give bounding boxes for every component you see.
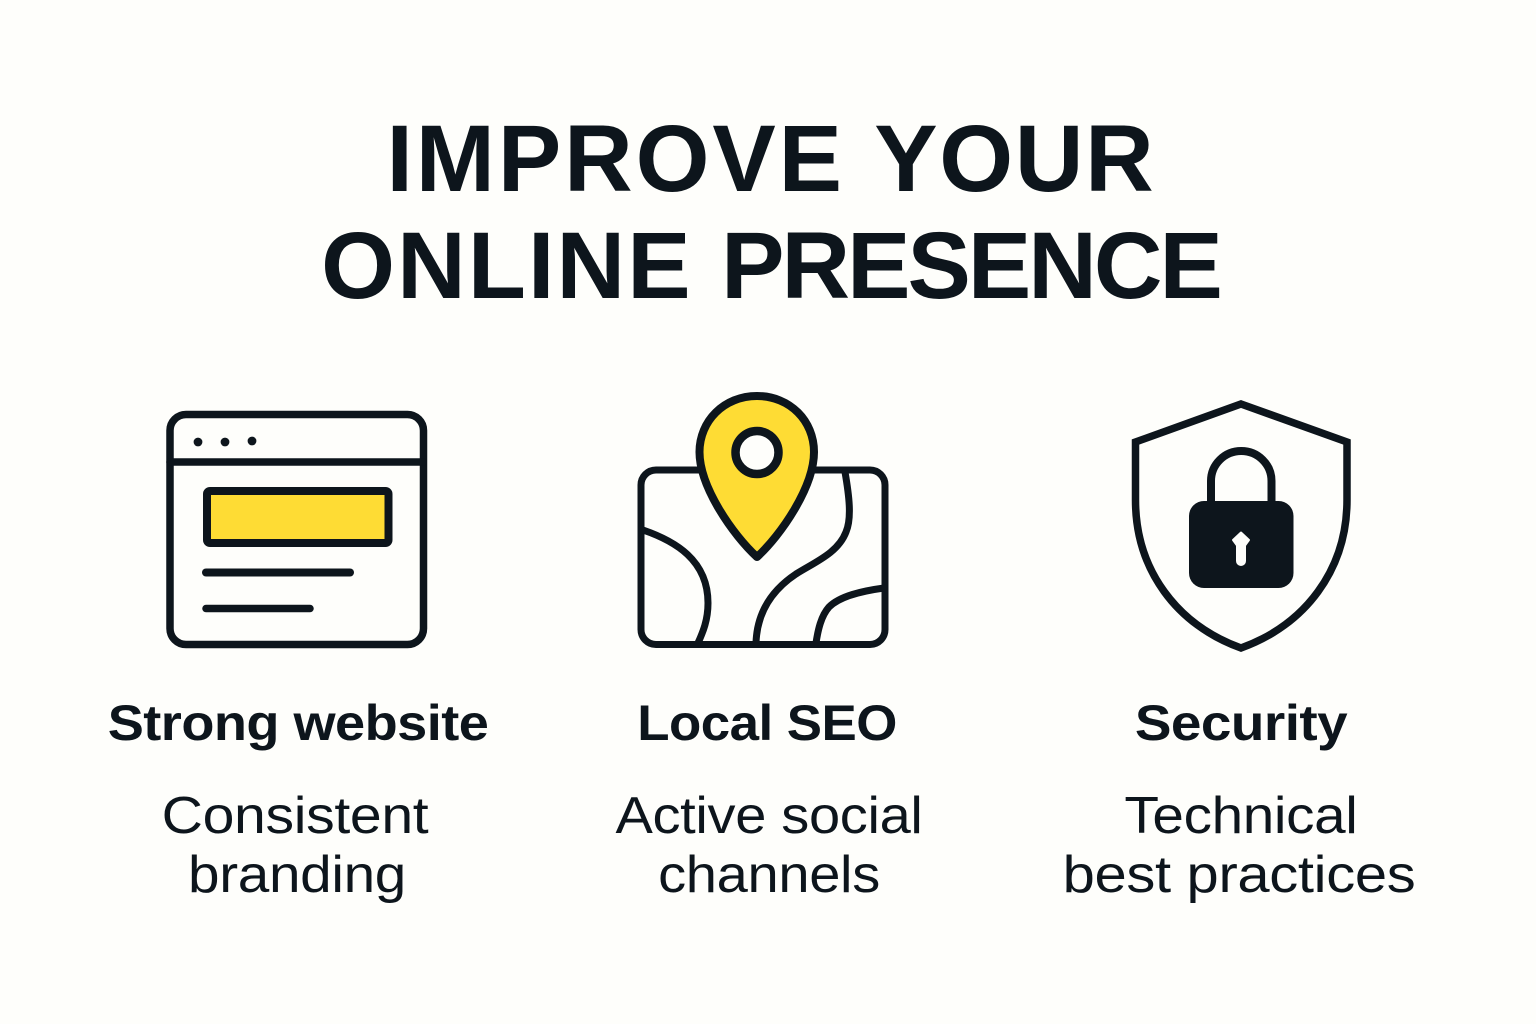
heading: security: Security <box>1135 695 1347 751</box>
heading: local seo: Local SEO <box>637 695 896 751</box>
text: consistent branding <box>162 787 428 904</box>
text: active social channels: channels <box>658 846 879 904</box>
icon: browser window <box>170 414 424 644</box>
text: active social channels <box>615 787 923 904</box>
text: active social channels: Active social <box>615 787 923 845</box>
text: consistent branding: Consistent <box>162 787 428 845</box>
title: ONLINE PRESENCE <box>321 213 1220 319</box>
heading: strong website: Strong website <box>108 695 488 751</box>
title <box>321 106 1220 319</box>
text: technical best practices <box>1062 787 1415 904</box>
icon: shield with padlock <box>1136 404 1347 648</box>
text: consistent branding: branding <box>188 846 406 904</box>
icon: map with location pin <box>641 396 885 644</box>
title: IMPROVE YOUR <box>386 106 1155 212</box>
text: technical best practices: Technical <box>1124 787 1358 845</box>
text: technical best practices: best practices <box>1062 846 1415 904</box>
